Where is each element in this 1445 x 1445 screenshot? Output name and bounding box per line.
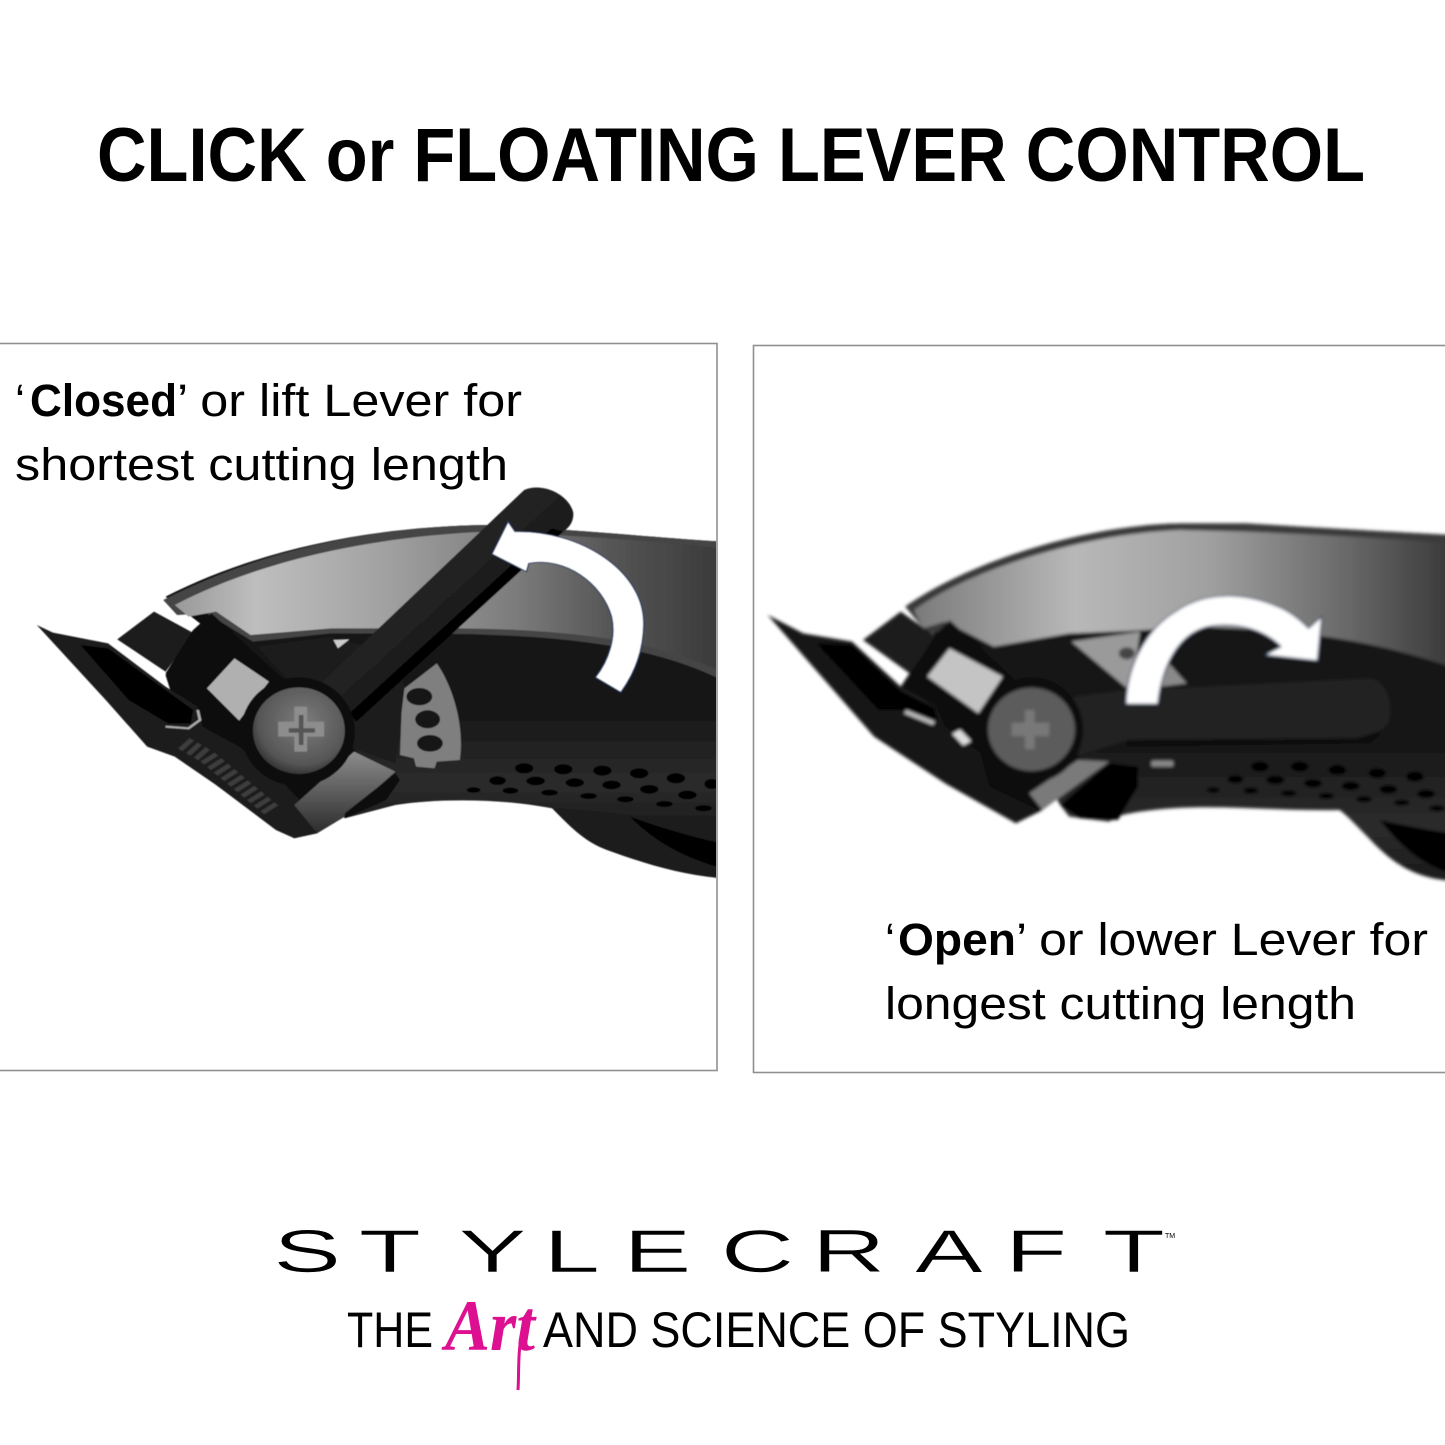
caption: open: ’ or lower Lever for: [1016, 914, 1428, 965]
tagline: THE: [347, 1302, 433, 1358]
body: [166, 525, 722, 830]
cutting head block: [117, 612, 194, 672]
arrow: lift lever: [492, 522, 644, 692]
trademark: TM: [1165, 1233, 1175, 1240]
silver gear detail: [1071, 632, 1140, 692]
brand logo: [273, 1218, 1175, 1390]
tagline: [347, 1286, 1130, 1366]
dark recess under shell: [989, 627, 1445, 740]
caption: closed: ‘: [15, 375, 25, 426]
caption: open: longest cutting length: [885, 978, 1356, 1029]
arrow: lower lever: [1126, 596, 1322, 704]
caption: closed: [15, 375, 522, 490]
blade guard: [768, 615, 1038, 823]
upper shell rim: [905, 523, 1445, 633]
tagline: Art: [441, 1286, 537, 1366]
lever arm: [317, 487, 573, 722]
pivot screw: [993, 677, 1083, 778]
handle underside: [552, 808, 716, 879]
handle panel: [1379, 820, 1445, 873]
silver block: [207, 658, 269, 721]
lower silver plate: [294, 752, 395, 833]
photo: clipper with lever raised: [37, 487, 722, 878]
body: [905, 523, 1445, 881]
dark gap behind lever: [286, 644, 405, 762]
panel frame: closed: [0, 344, 717, 1070]
caption: open: [885, 914, 1428, 1029]
caption: closed: shortest cutting length: [15, 439, 508, 490]
photo: clipper with lever lowered: [768, 523, 1445, 881]
head backing: [166, 630, 356, 838]
panel: open lever: [754, 346, 1445, 1072]
tagline: AND SCIENCE OF STYLING: [543, 1302, 1130, 1358]
wordmark: STYLECRAFT: STYLECRAFT: [273, 1218, 1165, 1285]
upper shell: [163, 525, 722, 680]
lever arm: [1074, 678, 1390, 757]
brush tail of the t in Art: [518, 1345, 520, 1390]
head backing: [899, 654, 1080, 824]
blade guard: [37, 625, 322, 838]
caption: closed: ’ or lift Lever for: [177, 375, 522, 426]
ventilation dots: [467, 763, 719, 811]
caption: open: ‘: [885, 914, 895, 965]
caption: open: Open: [898, 914, 1016, 965]
ventilation dots: [1207, 762, 1445, 811]
cutting head block: [863, 612, 936, 673]
panel frame: open: [754, 346, 1445, 1072]
panel: closed lever: [0, 344, 722, 1070]
upper shell: [912, 528, 1445, 666]
silver block: [927, 648, 1003, 713]
pivot screw: [241, 677, 355, 786]
silver vent plate: [400, 663, 461, 768]
caption: closed: Closed: [30, 375, 177, 426]
lower plate: [1029, 760, 1109, 810]
